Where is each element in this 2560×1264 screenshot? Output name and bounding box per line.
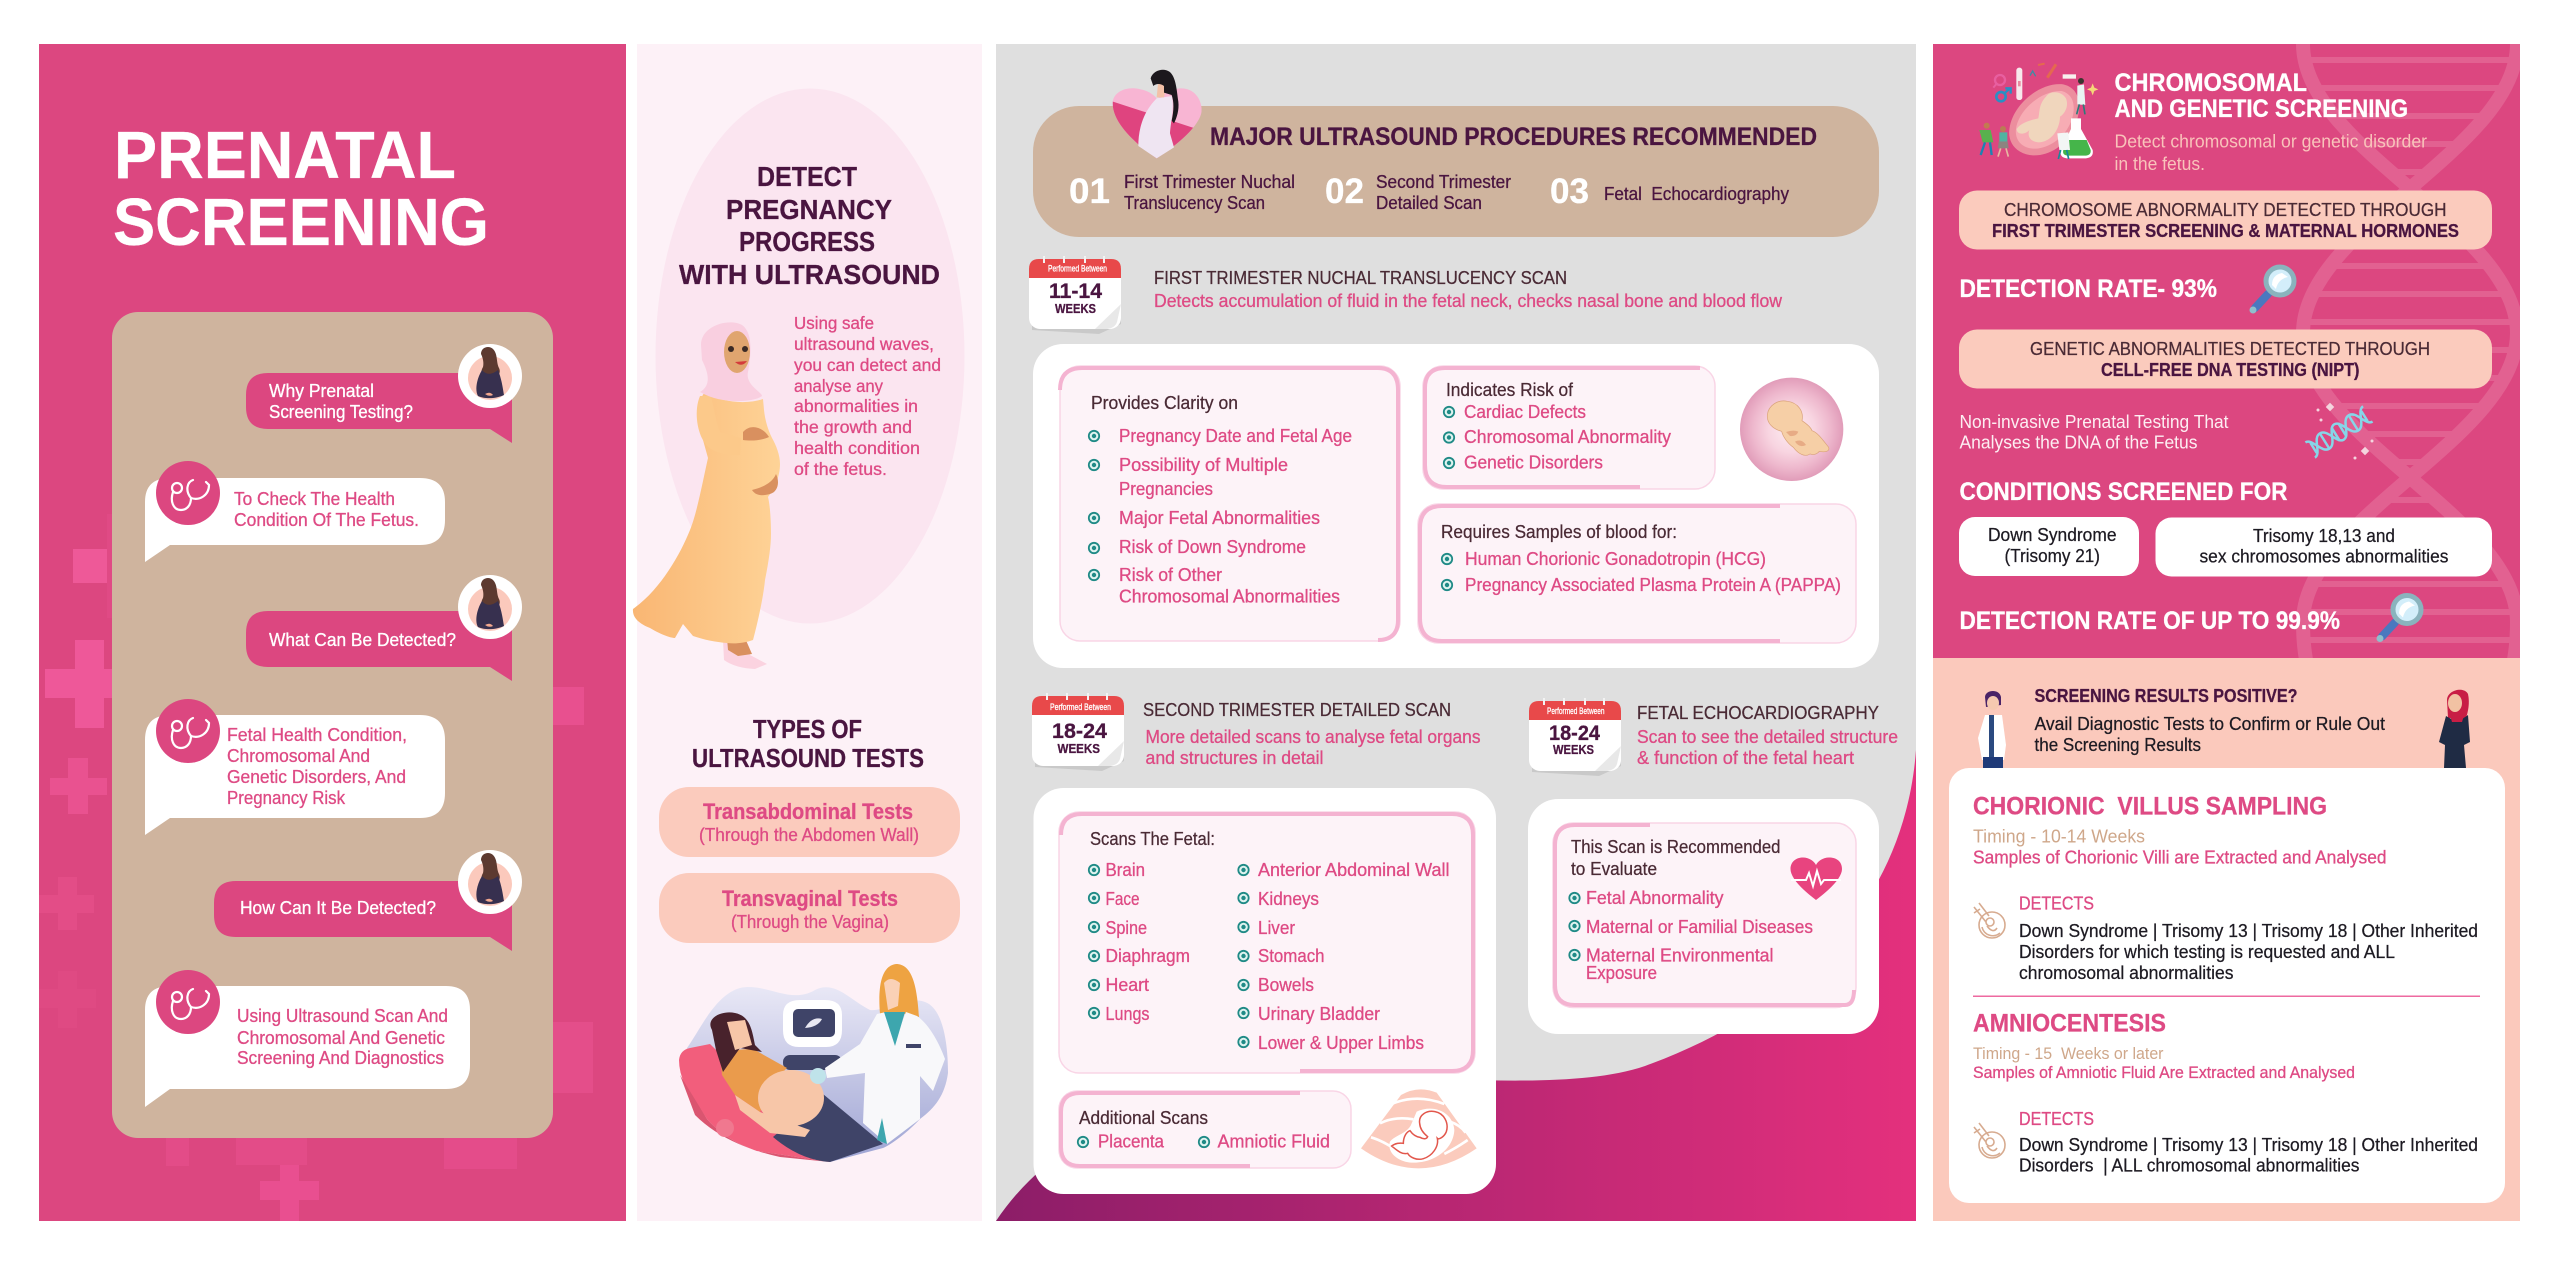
pill: transvaginal tests [659,873,960,943]
pill: genetic abnormalities [1959,330,2492,388]
section heading: first trimester: Detects accumulation of fluid in the fetal neck, checks nasal bone and blood flow [1154,291,1783,311]
illustration: doctor [1978,691,2006,768]
heading: detect pregnancy progress [679,161,940,290]
heading [2114,69,2408,123]
box: scans the fetal: Anterior Abdominal Wall [1258,860,1450,880]
stat: detection rate 93%: DETECTION RATE- 93% [1960,275,2217,303]
illustration: ultrasound exam [679,964,948,1162]
box: provides clarity on: Pregnancy Date and Fetal Age [1119,426,1352,446]
pill: genetic abnormalities: GENETIC ABNORMALITIES DETECTED THROUGH [2030,339,2430,359]
item 03: 03 [1550,172,1589,211]
box: scans the fetal: Scans The Fetal: [1090,829,1215,849]
illustration: pregnant woman [633,322,780,669]
calendar: 11-14 weeks: 11-14 [1049,280,1102,303]
panel: prenatal screening overview [39,44,626,1221]
test: chorionic villus sampling: Down Syndrome | Trisomy 13 | Trisomy 18 | Other Inherited [2019,921,2478,941]
card: diagnostic tests [1949,768,2505,1203]
answer bubble: ultrasound and screening: Chromosomal And Genetic [237,1028,445,1048]
answer bubble: ultrasound and screening [145,970,470,1107]
item 01: Translucency Scan [1124,193,1265,213]
illustration: woman in hijab [2439,690,2470,768]
box: indicates risk of: Cardiac Defects [1464,402,1586,422]
heading: types of ultrasound tests [692,714,924,773]
icon: DNA strand [2305,403,2374,460]
item 02 [1325,172,1511,213]
item 03 [1550,172,1789,211]
card: fetal echo details: This Scan is Recommended [1571,837,1780,857]
description text: of the fetus. [794,459,887,479]
card: fetal echo details: Maternal Environmental [1586,946,1774,966]
calendar: second trimester 18-24 weeks [1032,693,1124,771]
box: scans the fetal: Kidneys [1258,889,1319,909]
test: chorionic villus sampling: Disorders for which testing is requested and ALL [2019,942,2395,962]
box: scans the fetal: Stomach [1258,946,1324,966]
heading: screening results positive: SCREENING RESULTS POSITIVE? [2034,686,2298,706]
test: amniocentesis: AMNIOCENTESIS [1973,1010,2166,1038]
description text: analyse any [794,376,883,396]
box: indicates risk of [1423,366,1715,489]
description text: Using safe [794,313,874,333]
icon: heart with pregnant woman [1110,70,1205,160]
item 01 [1069,172,1295,213]
box: scans the fetal: Diaphragm [1106,946,1190,966]
answer bubble: ultrasound and screening: Screening And Diagnostics [237,1048,444,1068]
panel: chromosomal and genetic screening [1933,44,2520,700]
calendar: fetal echo 18-24 weeks: Performed Between [1547,706,1604,716]
calendar: 11-14 weeks: Performed Between [1048,264,1107,274]
answer bubble: detected conditions: Genetic Disorders, And [227,767,406,787]
test: chorionic villus sampling: Timing - 10-14 Weeks [1973,826,2145,846]
icon: magnifier [2376,596,2421,642]
box: additional scans: Amniotic Fluid [1218,1132,1330,1152]
test: amniocentesis: Disorders | ALL chromosomal abnormalities [2019,1156,2360,1176]
test: amniocentesis: Timing - 15 Weeks or later [1973,1044,2164,1063]
section heading: fetal echocardiography [1637,703,1898,768]
answer bubble: check health: To Check The Health [234,489,395,509]
title: SCREENING [113,185,489,260]
section heading: fetal echocardiography: FETAL ECHOCARDIOGRAPHY [1637,703,1879,723]
icon: ultrasound image of fetus [1361,1089,1477,1168]
banner [1033,70,1879,237]
heading: detect pregnancy progress: DETECT [757,161,857,192]
card: first trimester details [1033,344,1879,668]
chip: trisomy 18, 13 [2156,518,2492,576]
chat card [112,312,553,1138]
heading: types of ultrasound tests: ULTRASOUND TESTS [692,743,924,773]
item 02: Detailed Scan [1376,193,1482,213]
heading: AND GENETIC SCREENING [2114,95,2408,123]
box: provides clarity on: Possibility of Multiple [1119,455,1288,475]
heading: conditions screened for: CONDITIONS SCREENED FOR [1960,478,2288,506]
box: indicates risk of: Genetic Disorders [1464,452,1603,472]
section heading: first trimester [1154,268,1783,311]
box: additional scans: Additional Scans [1079,1108,1208,1128]
calendar: fetal echo 18-24 weeks [1529,698,1621,776]
chip: down syndrome: Down Syndrome [1988,525,2116,545]
heading: detect pregnancy progress: PREGNANCY [726,194,892,225]
answer bubble: detected conditions: Chromosomal And [227,746,370,766]
card: fetal echo details: Maternal or Familial Diseases [1586,917,1813,937]
pill: transabdominal tests: Transabdominal Tests [703,799,913,824]
box: additional scans: Placenta [1098,1132,1165,1152]
item 02: 02 [1325,172,1364,211]
title [113,118,489,260]
box: scans the fetal: Spine [1106,918,1147,938]
box: scans the fetal [1059,812,1475,1073]
card: fetal echo details: Fetal Abnormality [1586,888,1724,908]
text: avail diagnostic tests: the Screening Results [2034,735,2201,755]
box: scans the fetal: Urinary Bladder [1258,1004,1380,1024]
panel: diagnostic tests [1933,658,2520,1221]
answer bubble: detected conditions [145,699,445,835]
box: requires samples of blood: Pregnancy Associated Plasma Protein A (PAPPA) [1465,575,1841,595]
panel: detect pregnancy progress [633,44,982,1221]
card: fetal echo details: Exposure [1586,963,1657,983]
decorative DNA helix [2303,44,2517,700]
calendar: second trimester 18-24 weeks: WEEKS [1058,741,1100,756]
section heading: second trimester: SECOND TRIMESTER DETAILED SCAN [1143,700,1451,720]
test: chorionic villus sampling: Samples of Chorionic Villi are Extracted and Analysed [1973,848,2386,868]
heading: detect pregnancy progress: WITH ULTRASOUND [679,259,940,290]
item 02: Second Trimester [1376,172,1511,192]
pill: genetic abnormalities: CELL-FREE DNA TESTING (NIPT) [2101,360,2360,380]
box: requires samples of blood: Requires Samples of blood for: [1441,522,1677,542]
test: amniocentesis: Down Syndrome | Trisomy 13 | Trisomy 18 | Other Inherited [2019,1135,2478,1155]
item 01: First Trimester Nuchal [1124,172,1295,192]
description text: ultrasound waves, [794,334,934,354]
calendar: second trimester 18-24 weeks: Performed Between [1050,702,1111,712]
pill: transabdominal tests: (Through the Abdomen Wall) [699,825,919,845]
icon: heart with pulse [1790,858,1842,900]
heading: CHROMOSOMAL [2114,69,2307,97]
box: provides clarity on: Chromosomal Abnormalities [1119,586,1340,606]
box: requires samples of blood: Human Chorionic Gonadotropin (HCG) [1465,549,1766,569]
box: scans the fetal: Liver [1258,918,1295,938]
text: avail diagnostic tests [2034,714,2385,755]
answer bubble: detected conditions: Fetal Health Condition, [227,725,407,745]
box: provides clarity on: Pregnancies [1119,479,1213,499]
box: scans the fetal: Brain [1106,860,1145,880]
question bubble: why [246,344,522,443]
box: scans the fetal: Lower & Upper Limbs [1258,1033,1424,1053]
heading: MAJOR ULTRASOUND PROCEDURES RECOMMENDED [1210,123,1817,151]
section heading: fetal echocardiography: Scan to see the detailed structure [1637,727,1898,747]
description text: you can detect and [794,355,941,375]
stat: detection rate 99.9%: DETECTION RATE OF UP TO 99.9% [1960,607,2340,635]
question bubble: why: Screening Testing? [269,402,413,422]
box: requires samples of blood [1418,504,1856,643]
box: provides clarity on: Provides Clarity on [1091,393,1238,413]
heading: detect pregnancy progress: PROGRESS [739,226,875,257]
icon: magnifier [2250,267,2294,314]
box: provides clarity on: Major Fetal Abnormalities [1119,508,1320,528]
heading: types of ultrasound tests: TYPES OF [753,714,862,744]
text: avail diagnostic tests: Avail Diagnostic Tests to Confirm or Rule Out [2034,714,2385,734]
question bubble: why: Why Prenatal [269,381,374,401]
chip: trisomy 18, 13: sex chromosomes abnormalities [2200,546,2448,566]
test: chorionic villus sampling [1973,792,2478,983]
section heading: second trimester: More detailed scans to analyse fetal organs [1146,727,1480,747]
test: amniocentesis: Samples of Amniotic Fluid Are Extracted and Analysed [1973,1063,2355,1082]
pill: transvaginal tests: (Through the Vagina) [731,912,889,932]
question bubble: what: What Can Be Detected? [269,630,456,650]
test: chorionic villus sampling: CHORIONIC VILLUS SAMPLING [1973,792,2327,820]
text: non-invasive prenatal testing [1960,412,2228,452]
item 01: 01 [1069,172,1110,211]
section heading: first trimester: FIRST TRIMESTER NUCHAL TRANSLUCENCY SCAN [1154,268,1567,288]
pill: transabdominal tests [659,787,960,857]
section heading: second trimester: and structures in detail [1146,748,1324,768]
box: scans the fetal: Lungs [1106,1004,1150,1024]
answer bubble: check health: Condition Of The Fetus. [234,510,419,530]
calendar: 11-14 weeks: WEEKS [1055,301,1096,316]
question bubble: how [214,850,522,951]
section heading: fetal echocardiography: & function of the fetal heart [1637,748,1854,768]
pill: transvaginal tests: Transvaginal Tests [722,886,898,911]
box: provides clarity on: Risk of Other [1119,565,1222,585]
subheading: in the fetus. [2114,154,2205,174]
subheading: Detect chromosomal or genetic disorder [2114,132,2427,152]
answer bubble: detected conditions: Pregnancy Risk [227,788,346,808]
pill: chromosome abnormality: CHROMOSOME ABNORMALITY DETECTED THROUGH [2004,200,2446,220]
test: chorionic villus sampling: chromosomal abnormalities [2019,963,2234,983]
box: provides clarity on [1060,366,1400,641]
question bubble: what [246,575,522,681]
chip: trisomy 18, 13: Trisomy 18,13 and [2253,526,2395,546]
card: fetal echo details [1528,799,1879,1034]
calendar: fetal echo 18-24 weeks: 18-24 [1549,722,1600,745]
box: indicates risk of: Indicates Risk of [1446,380,1574,400]
description text [794,313,941,479]
decorative gradient wave [996,750,1916,1221]
panel: major ultrasound procedures [996,44,1916,1221]
test: amniocentesis [1973,1010,2478,1176]
description text: the growth and [794,417,912,437]
section heading: second trimester [1143,700,1480,768]
calendar: fetal echo 18-24 weeks: WEEKS [1553,742,1594,757]
box: scans the fetal: Face [1106,889,1140,909]
item 03: Fetal Echocardiography [1604,184,1789,204]
subheading [2114,132,2427,174]
test: amniocentesis: DETECTS [2019,1109,2094,1129]
calendar: second trimester 18-24 weeks: 18-24 [1052,720,1107,743]
chip: down syndrome: (Trisomy 21) [2004,546,2100,566]
box: scans the fetal: Heart [1106,975,1149,995]
question bubble: how: How Can It Be Detected? [240,898,436,918]
box: scans the fetal: Bowels [1258,975,1314,995]
box: indicates risk of: Chromosomal Abnormality [1464,427,1671,447]
background medical crosses [39,514,593,1221]
card: second trimester details [1034,788,1496,1194]
description text: abnormalities in [794,396,918,416]
test: chorionic villus sampling: DETECTS [2019,894,2094,914]
answer bubble: check health [145,461,445,562]
pill: chromosome abnormality: FIRST TRIMESTER SCREENING & MATERNAL HORMONES [1992,221,2459,241]
answer bubble: ultrasound and screening: Using Ultrasound Scan And [237,1006,448,1026]
pill: chromosome abnormality [1959,190,2492,250]
box: additional scans [1059,1091,1351,1168]
card: fetal echo details: to Evaluate [1571,859,1657,879]
calendar: 11-14 weeks [1029,256,1121,334]
description text: health condition [794,438,920,458]
icon: fetus and lab scientists [1979,64,2098,159]
title: PRENATAL [114,118,456,193]
text: non-invasive prenatal testing: Analyses the DNA of the Fetus [1960,432,2198,452]
icon: fetus in womb [1740,378,1843,481]
box: provides clarity on: Risk of Down Syndrome [1119,537,1306,557]
chip: down syndrome [1959,517,2139,576]
text: non-invasive prenatal testing: Non-invasive Prenatal Testing That [1960,412,2228,432]
